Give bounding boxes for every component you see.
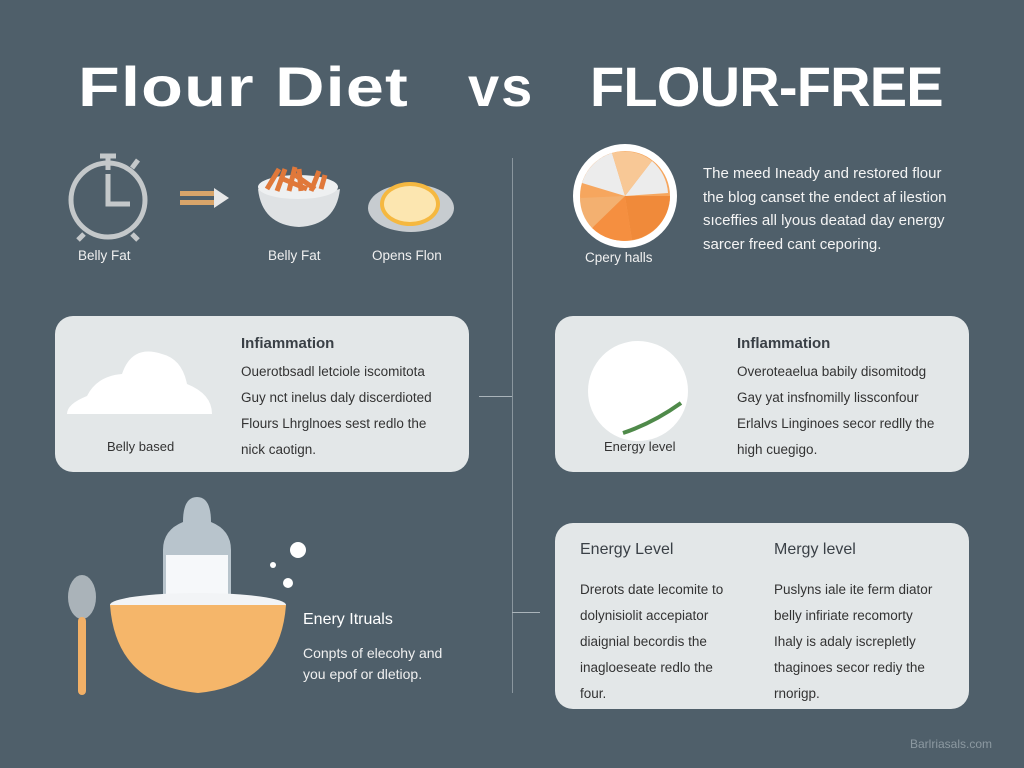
panel: right inflammation: [555, 316, 969, 472]
panel: left inflammation: nick caotign.: [241, 442, 316, 457]
panel: energy level: Energy Level: [580, 541, 673, 558]
icon: flour circle with herb: [588, 341, 688, 441]
panel: right inflammation: Overoteaelua babily disomitodg: [737, 364, 926, 379]
text block top right: the blog canset the endect af ilestion: [703, 188, 947, 206]
panel: right inflammation: Inflammation: [737, 335, 830, 352]
panel: energy level: inagloeseate redlo the: [580, 660, 713, 675]
text block bottom left: [303, 611, 442, 682]
text block top right: The meed Ineady and restored flour: [703, 165, 941, 182]
panel: energy level: thaginoes secor rediy the: [774, 660, 925, 675]
text block top right: sıceffies all lyous deatad day energy: [703, 212, 945, 229]
text: Cpery halls: [585, 250, 653, 265]
text block top right: [703, 165, 947, 252]
panel: energy level: Mergy level: [774, 541, 856, 558]
title: vs: [468, 55, 534, 118]
panel: right inflammation: Gay yat insfnomilly lissconfour: [737, 390, 919, 405]
panel: energy level: four.: [580, 686, 606, 701]
panel: left inflammation: Ouerotbsadl letciole iscomitota: [241, 364, 425, 379]
icon: bowl with jar: [110, 497, 306, 693]
panel: right inflammation: high cuegigo.: [737, 442, 817, 457]
panel: left inflammation: [55, 316, 469, 472]
panel: left inflammation: Belly based: [107, 439, 174, 454]
panel: right inflammation: Erlalvs Linginoes secor redlly the: [737, 416, 934, 431]
icon: arrow: [180, 188, 229, 208]
panel: left inflammation: Guy nct inelus daly discerdioted: [241, 390, 432, 405]
watermark: Barlriasals.com: [910, 737, 992, 751]
text block top right: sarcer freed cant ceporing.: [703, 236, 881, 252]
panel: energy level: diaignial becordis the: [580, 634, 707, 649]
text block bottom left: Conpts of elecohy and: [303, 645, 442, 661]
title: FLOUR-FREE: [590, 55, 943, 118]
text block bottom left: you epof or dletiop.: [303, 666, 422, 682]
panel: energy level: Puslyns iale ite ferm diator: [774, 582, 932, 597]
panel: energy level: Drerots date lecomite to: [580, 582, 723, 597]
panel: energy level: Ihaly is adaly iscrepletly: [774, 634, 916, 649]
panel: energy level: belly infiriate recomorty: [774, 608, 913, 623]
text block bottom left: Enery Itruals: [303, 611, 393, 628]
icon: plate with orange: [368, 182, 454, 232]
icon: bowl of fries: [258, 166, 340, 227]
icon: pie circle: [573, 144, 677, 248]
icon: stopwatch: [68, 154, 148, 242]
panel: left inflammation: Infiammation: [241, 335, 334, 352]
labels top left: Belly Fat: [78, 248, 131, 263]
title: [78, 55, 943, 118]
panel: energy level: [555, 523, 969, 709]
panel: right inflammation: Energy level: [604, 439, 676, 454]
panel: energy level: dolynisiolit accepiator: [580, 608, 708, 623]
panel: energy level: rnorigp.: [774, 686, 820, 701]
panel: left inflammation: Flours Lhrglnoes sest redlo the: [241, 416, 426, 431]
title: Flour Diet: [78, 55, 409, 118]
text: Belly Fat: [268, 248, 321, 263]
icon: flour pile: [67, 352, 212, 414]
text: Opens Flon: [372, 248, 442, 263]
icon: spoon: [68, 575, 96, 695]
